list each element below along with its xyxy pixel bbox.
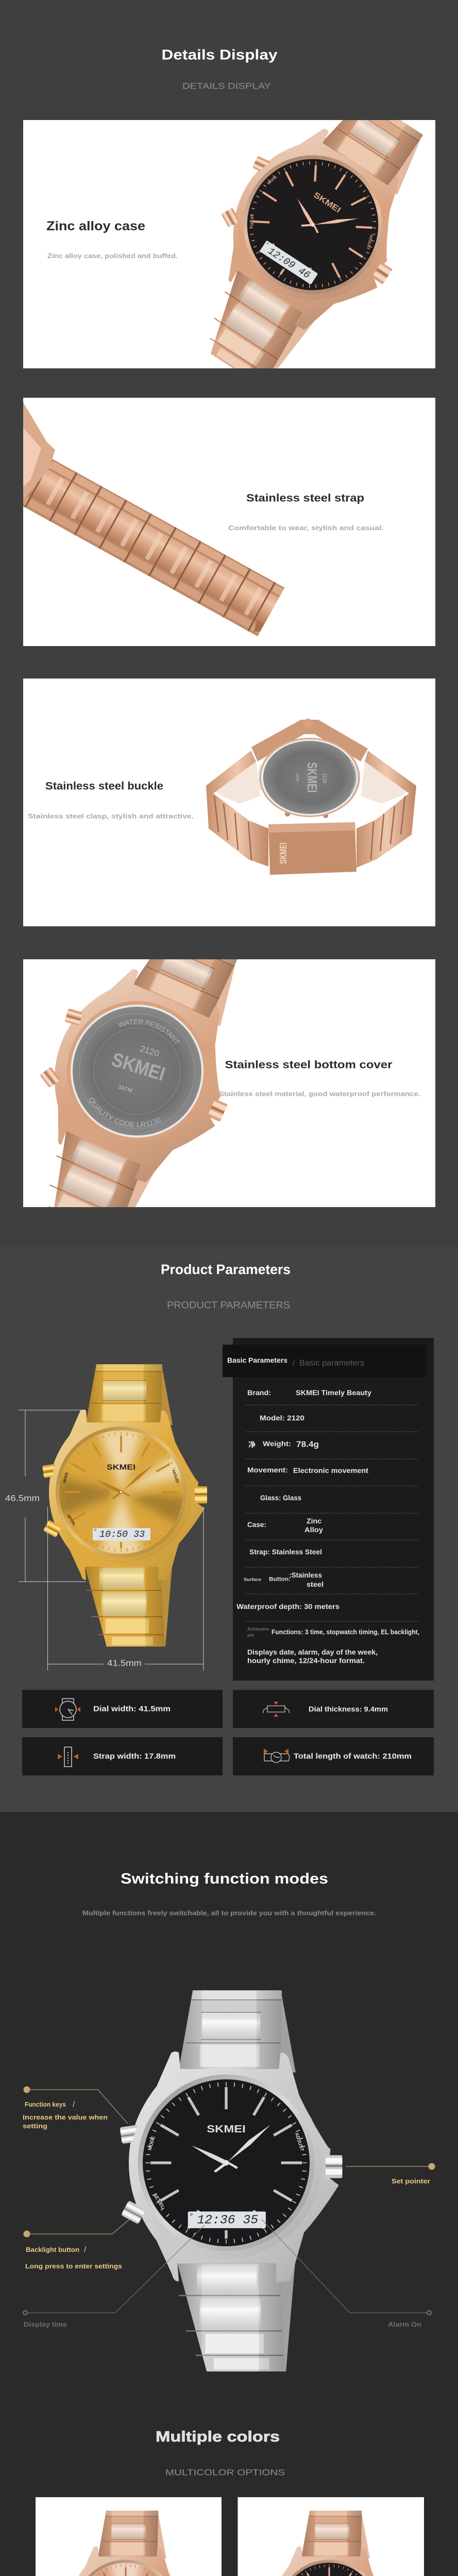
clasp [268,822,357,875]
spec rows: Surface [244,1577,261,1582]
callout: function keys: setting [23,2123,47,2130]
callout: function keys: / [73,2100,75,2109]
panel: stainless steel strap [0,398,435,646]
photo: case back close-up: 3ATM [117,1084,133,1094]
callout: alarm on: Alarm On [388,2321,421,2328]
panel: basic parameters [223,1338,434,1681]
icon: dial width [55,1699,80,1720]
heading: strap: Stainless steel strap [246,493,364,504]
callout: backlight button: / [84,2245,87,2255]
spec rows: Case: [247,1520,266,1529]
watch: gold dial with dimensions: MODE [63,1472,69,1483]
watch: silver black dial: 12:36 35 [197,2214,258,2228]
heading: buckle: Stainless steel buckle [45,780,163,792]
watch: gold dial with dimensions: SET/EL [66,1514,76,1527]
spec rows [236,1388,419,1665]
section heading: switching function modes [82,1871,376,1917]
section heading: details display [162,46,278,91]
photo: case back close-up [40,959,238,1207]
card: rose gold rose dial [36,2497,222,2576]
watch: rose gold black dial [267,2511,397,2576]
section heading: product parameters: Product Parameters [161,1262,291,1277]
page background: product parameter shade [0,1247,458,1812]
card: total length [233,1737,434,1775]
watch photo: rose gold black dial angled: ADJUST [365,234,374,250]
page background: dark sections [0,1812,458,2576]
watch: rose gold rose dial [63,2511,194,2576]
spec rows: Achievem- [247,1626,270,1632]
heading: bottom cover: Stainless steel bottom cover [225,1059,393,1071]
spec rows: hourly chime, 12/24-hour format. [247,1656,365,1665]
section heading: multiple colors: MULTICOLOR OPTIONS [165,2468,285,2477]
callout: backlight button: Long press to enter settings [25,2263,122,2270]
spec rows: Zinc [307,1517,321,1525]
card: strap width [22,1737,223,1775]
card: dial width [22,1690,223,1728]
panel: zinc alloy case [23,120,435,368]
watch photo: rose gold black dial angled: P [266,242,269,246]
callout: function keys [23,2087,128,2130]
watch: silver black dial: P [190,2213,193,2217]
card: strap width: Strap width: 17.8mm [93,1752,176,1761]
callout: alarm on [261,2219,431,2328]
watch: silver black dial: SET/EL [152,2192,166,2210]
watch: gold dial with dimensions: P [94,1529,96,1532]
description: buckle: Stainless steel clasp, stylish and attractive. [28,812,194,820]
watch photo: rose gold black dial angled: MODE [266,175,278,185]
callout: set pointer: Set pointer [392,2178,430,2185]
callout: function keys: Increase the value when [23,2114,108,2121]
section heading: details display: DETAILS DISPLAY [182,81,271,91]
callout: backlight button [24,2219,130,2270]
section heading: product parameters [161,1262,291,1311]
case back: 2120 [321,773,327,784]
spec rows: SKMEI Timely Beauty [296,1388,371,1397]
watch: silver black dial: MODE [147,2136,157,2151]
spec rows: Electronic movement [293,1466,368,1475]
photo: case back close-up: 2120 [139,1044,160,1059]
header band: Basic Parameters [227,1356,287,1364]
case back: WATER RESISTANT [349,760,358,795]
spec rows: Model: 2120 [260,1414,304,1422]
spec rows: :Stainless [289,1571,322,1579]
card: rose gold black [238,2497,424,2576]
photo: case back close-up: WATER RESISTANT [117,1019,180,1044]
description: zinc alloy case: Zinc alloy case, polished and buffed. [47,252,178,260]
watch photo: rose gold black dial angled [154,65,458,412]
icon: strap width [58,1747,78,1767]
spec rows: steel [307,1580,324,1588]
icon: dial thickness [263,1702,289,1717]
spec rows: Brand: [247,1388,271,1397]
spec rows: Waterproof depth: 30 meters [236,1602,340,1611]
panel: stainless steel bottom cover [23,959,435,1207]
dimension: height 46.5mm [5,1410,86,1582]
spec rows: Functions: 3 time, stopwatch timing, EL backlight, [272,1629,419,1636]
spec rows: Weight: [263,1439,291,1448]
watch: gold dial with dimensions [42,1364,207,1647]
watch: silver black dial: SKMEI [207,2124,246,2135]
watch: silver black dial [120,1990,342,2371]
icon: total length [264,1749,290,1762]
card: total length: Total length of watch: 210mm [294,1752,412,1761]
heading: zinc alloy case: Zinc alloy case [46,219,145,233]
header band [223,1345,426,1377]
photo: bracelet loop with clasp [206,719,416,875]
dimension: width 41.5mm: 41.5mm [107,1658,142,1668]
spec rows: Button: [269,1577,291,1583]
spec rows: Alloy [304,1526,323,1534]
section heading: details display: Details Display [162,46,278,63]
photo: strap close-up [0,402,284,636]
callout: display time [23,2225,205,2328]
page background: upper sections [0,0,458,1812]
description: bottom cover: Stainless steel material, good waterproof performance. [219,1090,420,1097]
spec rows: 净 [248,1440,256,1449]
photo: case back close-up: SKMEI [109,1049,167,1086]
section heading: switching function modes: Switching function modes [121,1871,328,1887]
photo: bracelet loop with clasp: SKMEI [278,842,289,864]
panel: stainless steel buckle [23,679,435,926]
dimension: height 46.5mm: 46.5mm [5,1493,40,1503]
description: strap: Comfortable to wear, stylish and casual. [228,524,384,532]
spec rows: ent [247,1633,254,1638]
spec rows: Strap: Stainless Steel [249,1548,322,1556]
callout: display time: Display time [24,2321,67,2328]
watch photo: rose gold black dial angled: 12:09 46 [266,245,312,281]
dimension: width 41.5mm [47,1507,203,1670]
callout: backlight button: Backlight button [26,2246,79,2253]
case back: SKMEI [304,762,319,793]
header band: Basic parameters [299,1359,364,1367]
section heading: multiple colors: Multiple colors [156,2429,280,2445]
watch photo: rose gold black dial angled: SKMEI [312,191,342,215]
section heading: multiple colors [156,2429,285,2477]
card: dial thickness [233,1690,434,1728]
spec rows: Movement: [247,1466,288,1474]
card: dial width: Dial width: 41.5mm [93,1704,171,1714]
watch: gold dial with dimensions: ADJUST [171,1469,179,1484]
case back [258,738,360,817]
callout: function keys: Function keys [25,2101,66,2108]
case back: 3ATM [295,773,299,782]
watch: gold dial with dimensions: SKMEI [107,1463,135,1471]
watch photo: rose gold black dial angled: SET/EL [249,214,255,228]
case back: CODE LR1130 [258,765,263,790]
spec rows: 78.4g [296,1440,319,1449]
watch: gold dial with dimensions: 10:50 33 [99,1530,145,1540]
spec rows: Glass: Glass [260,1494,301,1502]
spec rows: Displays date, alarm, day of the week, [247,1648,378,1656]
watch: silver black dial: ADJUST [294,2132,305,2152]
card: dial thickness: Dial thickness: 9.4mm [309,1705,388,1713]
callout: set pointer [346,2163,435,2185]
photo: case back close-up: QUALITY CODE LR1130 [89,1097,161,1127]
section heading: switching function modes: Multiple functions freely switchable, all to provide you with a thoughtful experience. [82,1909,376,1917]
header band: / [293,1359,295,1367]
section heading: product parameters: PRODUCT PARAMETERS [167,1300,290,1311]
